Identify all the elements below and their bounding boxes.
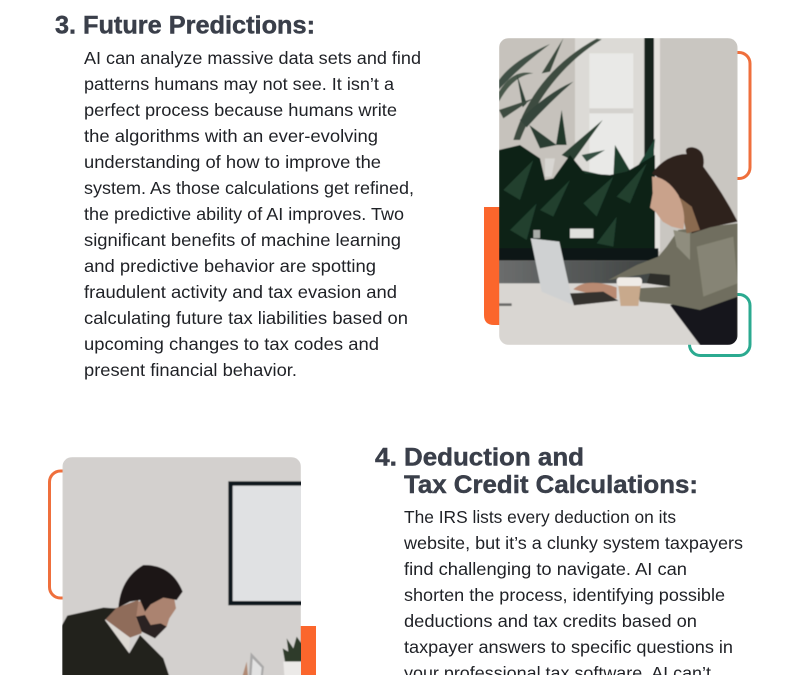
accent: solid orange block, top photo [484, 207, 510, 325]
accent: orange outline bracket, top photo [700, 52, 750, 178]
coffee cup [618, 286, 641, 306]
plant and pot [282, 636, 301, 662]
woman sleeves and shirt [608, 223, 738, 310]
woman face [650, 177, 684, 229]
man shirt [105, 620, 130, 652]
text block: future predictions body: the predictive ability of AI improves. Two [84, 204, 404, 224]
heading: 4. Deduction and Tax Credit Calculations: Deduction and [404, 444, 584, 472]
photo: man with a tablet in front of a framed picture [58, 457, 306, 675]
picture frame [228, 481, 305, 605]
upper palm fronds [499, 44, 550, 89]
text block: future predictions body: calculating future tax liabilities based on [84, 308, 408, 328]
text block: future predictions body: patterns humans may not see. It isn’t a [84, 74, 394, 94]
text block: deduction body: deductions and tax credits based on [404, 611, 697, 631]
text block: future predictions body: perfect process because humans write [84, 100, 397, 120]
text block: deduction body: The IRS lists every deduction on its [404, 507, 676, 527]
heading: 4. Deduction and Tax Credit Calculations: Tax Credit Calculations: [404, 471, 698, 499]
heading: 3. Future Predictions: Future Predictions: [83, 12, 315, 40]
text block: deduction body: shorten the process, identifying possible [404, 585, 725, 605]
text block: future predictions body: understanding of how to improve the [84, 152, 381, 172]
text block: future predictions body: present financial behavior. [84, 360, 297, 380]
man hoodie [58, 608, 177, 675]
hands [573, 283, 617, 299]
laptop [531, 238, 573, 305]
heading: 3. Future Predictions: 3. [55, 12, 76, 40]
man neck [105, 600, 142, 638]
man beard [136, 615, 167, 638]
text block: deduction body: website, but it’s a clunky system taxpayers [403, 533, 743, 553]
photo: woman working on a laptop beside plants [499, 38, 738, 345]
text block: future predictions body: significant benefits of machine learning [84, 230, 401, 250]
man face [136, 596, 176, 627]
woman hair [652, 147, 738, 233]
heading: 4. Deduction and Tax Credit Calculations: 4. [375, 444, 397, 472]
text block: future predictions body [84, 48, 421, 380]
text block: future predictions body: the algorithms with an ever-evolving [84, 126, 378, 146]
woman lower body [670, 293, 738, 345]
text block: future predictions body: AI can analyze massive data sets and find [84, 48, 421, 68]
tablet and hand [247, 652, 264, 675]
text block: future predictions body: system. As those calculations get refined, [84, 178, 414, 198]
text block: future predictions body: upcoming changes to tax codes and [84, 334, 379, 354]
text block: future predictions body: and predictive behavior are spotting [84, 256, 376, 276]
text block: deduction body: find challenging to navigate. AI can [404, 559, 687, 579]
plant mass [499, 145, 655, 250]
text block: future predictions body: fraudulent activity and tax evasion and [84, 282, 397, 302]
accent: orange outline bracket, lower photo [50, 471, 100, 598]
accent: solid orange block, lower photo [290, 626, 316, 675]
text block: deduction body: taxpayer answers to specific questions in [404, 637, 733, 657]
accent: teal outline bracket, top photo [690, 294, 750, 356]
text block: deduction body [403, 507, 743, 675]
heading: 4. Deduction and Tax Credit Calculations [375, 444, 698, 499]
man hair [118, 565, 183, 612]
